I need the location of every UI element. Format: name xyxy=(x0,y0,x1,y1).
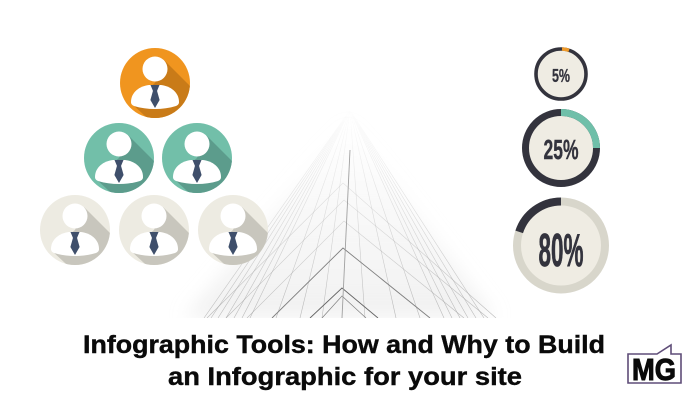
donut: 80%: 80% xyxy=(538,224,584,276)
donut charts xyxy=(517,49,605,290)
donut: 5%: 5% xyxy=(552,66,570,86)
title xyxy=(83,331,605,391)
icon: person teal left xyxy=(84,123,165,204)
icon: person teal right xyxy=(162,123,243,204)
icon: person beige right xyxy=(198,195,279,276)
donut: 80% xyxy=(517,202,605,290)
donut: 25% xyxy=(526,112,596,184)
icon: person beige middle xyxy=(119,195,200,276)
org chart icons xyxy=(40,48,279,276)
logo: MG: MG xyxy=(632,352,676,387)
title: Infographic Tools: How and Why to Build xyxy=(83,331,605,359)
donut: 5% xyxy=(536,49,586,99)
title: an Infographic for your site xyxy=(168,363,522,391)
donut: 25%: 25% xyxy=(544,134,579,165)
icon: person beige left xyxy=(40,195,121,276)
icon: person orange xyxy=(120,48,201,129)
skyscraper background xyxy=(200,134,496,318)
